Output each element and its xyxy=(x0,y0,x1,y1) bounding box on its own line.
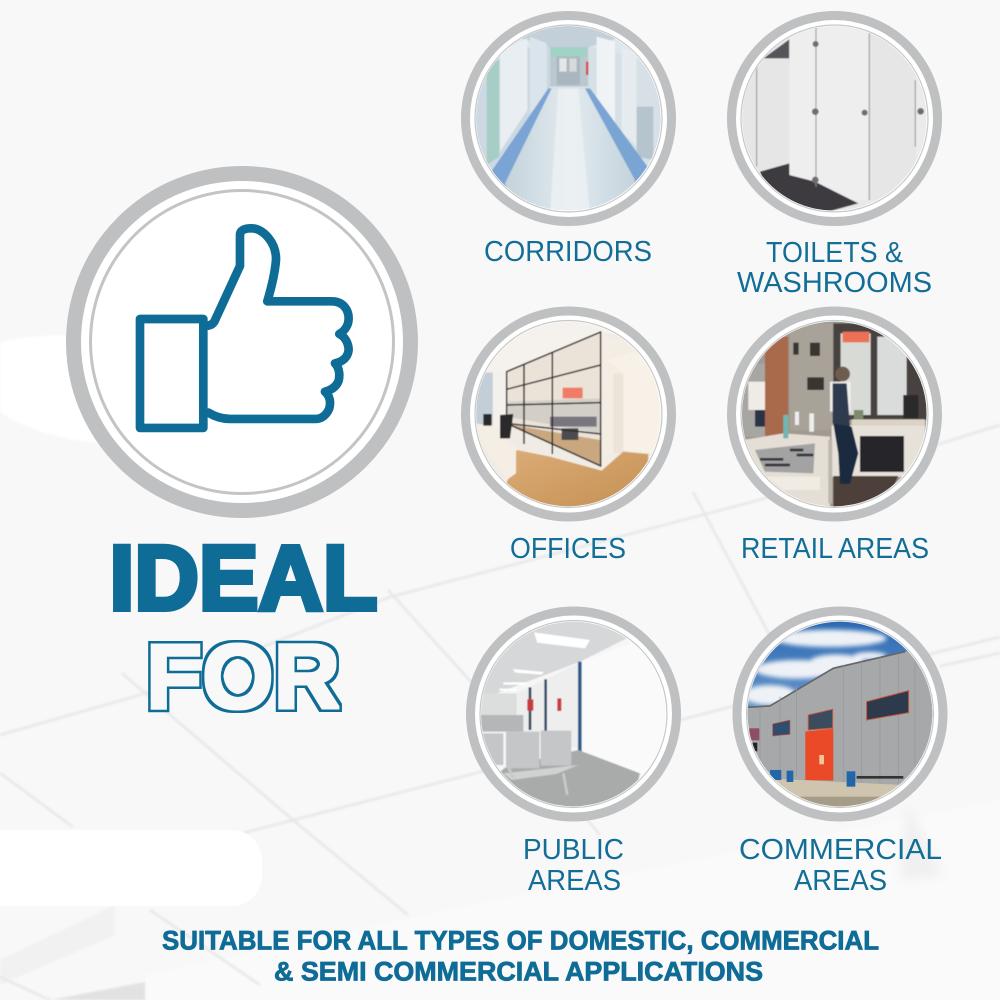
panel: corridors xyxy=(466,16,672,222)
photo: corridor xyxy=(473,23,663,213)
photo: industrial building xyxy=(743,620,937,813)
label: commercial areas: COMMERCIAL xyxy=(739,834,942,866)
badge: thumbs up xyxy=(74,174,410,510)
panel: offices xyxy=(466,311,672,517)
label: offices: OFFICES xyxy=(510,533,626,565)
footer text: & SEMI COMMERCIAL APPLICATIONS xyxy=(274,956,763,986)
panel: public areas xyxy=(470,611,676,817)
photo: barber shop xyxy=(740,320,930,513)
label: public areas xyxy=(523,834,624,897)
panel: toilets and washrooms xyxy=(732,16,938,222)
label: toilets and washrooms: TOILETS & xyxy=(766,237,903,269)
label: public areas: PUBLIC xyxy=(523,834,624,866)
label: toilets and washrooms xyxy=(737,237,932,299)
heading: FOR: FOR xyxy=(146,626,340,728)
footer text: SUITABLE FOR ALL TYPES OF DOMESTIC, COMMERCIAL xyxy=(162,926,879,956)
photo: glass office xyxy=(473,320,663,513)
label: corridors: CORRIDORS xyxy=(484,236,652,268)
heading: IDEAL: IDEAL xyxy=(110,528,378,630)
label: toilets and washrooms: WASHROOMS xyxy=(737,267,932,299)
photo: toilet cubicles xyxy=(740,23,930,217)
icon: thumbs up xyxy=(140,228,349,428)
photo: waiting room xyxy=(481,622,643,806)
label: commercial areas xyxy=(739,834,942,897)
panel: retail areas xyxy=(732,311,938,517)
panel: commercial areas xyxy=(737,611,943,817)
label: public areas: AREAS xyxy=(528,865,621,897)
label: commercial areas: AREAS xyxy=(794,865,887,897)
footer text xyxy=(162,926,879,986)
label: retail areas: RETAIL AREAS xyxy=(741,533,929,565)
